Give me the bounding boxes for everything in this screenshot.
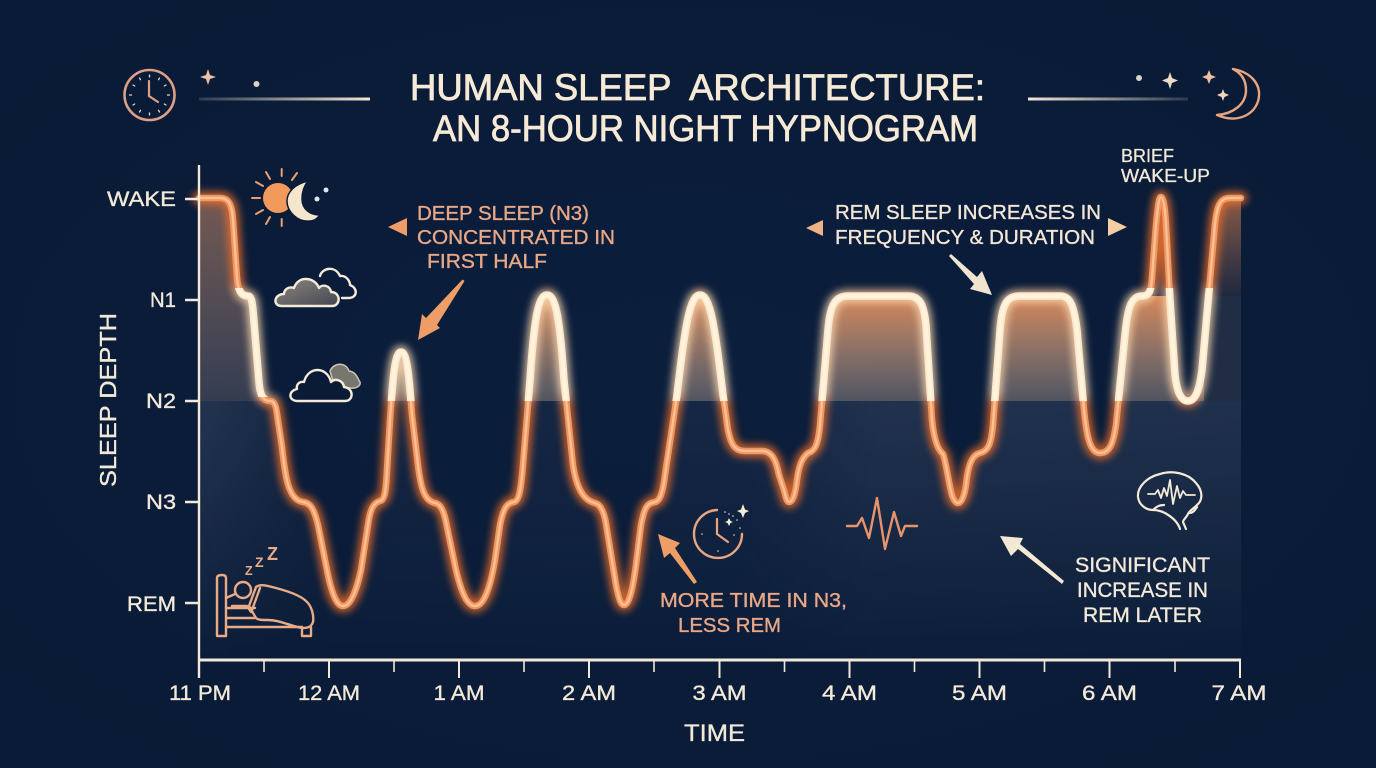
callout text: MORE TIME IN N3, bbox=[660, 590, 847, 612]
y axis stage labels: N2 bbox=[146, 390, 176, 413]
icon: brain with EEG bbox=[1138, 472, 1201, 529]
x axis time labels: 6 AM bbox=[1082, 682, 1137, 705]
icon: crescent moon bbox=[1217, 69, 1259, 119]
icon: clock with sparkles bbox=[694, 504, 749, 558]
callout text: FREQUENCY & DURATION bbox=[835, 227, 1095, 249]
callout text bbox=[835, 202, 1101, 249]
callout text: CONCENTRATED IN bbox=[417, 227, 615, 249]
callout text: DEEP SLEEP (N3) bbox=[417, 203, 589, 225]
callout text bbox=[660, 590, 847, 637]
icon: sleeping person in bed bbox=[217, 544, 313, 636]
y axis stage labels: REM bbox=[127, 593, 176, 616]
icon: brain wave bbox=[847, 498, 917, 549]
y axis stage labels: WAKE bbox=[107, 188, 176, 211]
icon: sleeping person in bed: Z bbox=[245, 564, 253, 578]
icon: sleeping person in bed: Z bbox=[267, 544, 278, 564]
x axis time labels: 12 AM bbox=[298, 682, 360, 705]
line: light stages (cream) bbox=[234, 288, 1213, 405]
callout: brief wake-up: WAKE-UP bbox=[1121, 166, 1210, 186]
header decoration: left stars and line bbox=[199, 69, 370, 100]
arrow bbox=[949, 254, 992, 295]
x axis time labels: 5 AM bbox=[952, 682, 1007, 705]
callout text bbox=[417, 203, 615, 273]
area fill under the curve bbox=[199, 190, 1241, 660]
callout: brief wake-up bbox=[1121, 146, 1210, 186]
title: HUMAN SLEEP ARCHITECTURE: bbox=[410, 67, 985, 108]
icon: sun and moon bbox=[252, 169, 328, 226]
callout text: REM LATER bbox=[1083, 604, 1202, 627]
icon: sleeping person in bed: Z bbox=[255, 554, 264, 570]
callout: REM increases bbox=[806, 202, 1127, 295]
y axis bbox=[185, 165, 199, 678]
callout: more time in N3 bbox=[658, 534, 847, 637]
header decoration: right stars and line bbox=[1028, 70, 1229, 101]
soft glow around the line bbox=[199, 197, 1241, 606]
callout text: SIGNIFICANT bbox=[1075, 554, 1210, 577]
y axis stage labels: N3 bbox=[146, 491, 176, 514]
callout text: INCREASE IN bbox=[1077, 579, 1208, 602]
icon: clouds lower bbox=[290, 364, 360, 401]
x axis time labels: 3 AM bbox=[692, 682, 746, 705]
x axis time labels: 7 AM bbox=[1212, 682, 1266, 705]
callout: deep sleep bbox=[388, 203, 615, 340]
y axis stage labels bbox=[107, 188, 176, 616]
x axis bbox=[199, 660, 1241, 678]
title: AN 8-HOUR NIGHT HYPNOGRAM bbox=[433, 108, 978, 149]
callout text bbox=[1075, 554, 1210, 627]
line: deep stages (orange) bbox=[199, 197, 1241, 606]
arrow bbox=[1000, 536, 1064, 584]
icon: clouds upper bbox=[275, 269, 356, 306]
arrow bbox=[658, 534, 697, 584]
x axis time labels bbox=[169, 682, 1266, 705]
arrow bbox=[418, 280, 464, 340]
callout: brief wake-up: BRIEF bbox=[1121, 146, 1174, 166]
x axis title: TIME bbox=[684, 720, 745, 747]
callout: significant increase in REM bbox=[1000, 536, 1210, 627]
callout text: REM SLEEP INCREASES IN bbox=[835, 202, 1101, 224]
icon: wall clock bbox=[124, 70, 174, 120]
callout text: FIRST HALF bbox=[427, 251, 547, 273]
x axis time labels: 2 AM bbox=[562, 682, 616, 705]
x axis time labels: 4 AM bbox=[822, 682, 877, 705]
y axis stage labels: N1 bbox=[150, 289, 176, 312]
title bbox=[410, 67, 985, 149]
y axis title: SLEEP DEPTH bbox=[95, 313, 121, 487]
x axis time labels: 11 PM bbox=[169, 682, 231, 705]
chart: hypnogram bbox=[199, 190, 1241, 660]
triangle marker bbox=[388, 218, 407, 236]
triangles bbox=[806, 220, 823, 236]
x axis time labels: 1 AM bbox=[434, 682, 484, 705]
callout text: LESS REM bbox=[678, 615, 781, 637]
